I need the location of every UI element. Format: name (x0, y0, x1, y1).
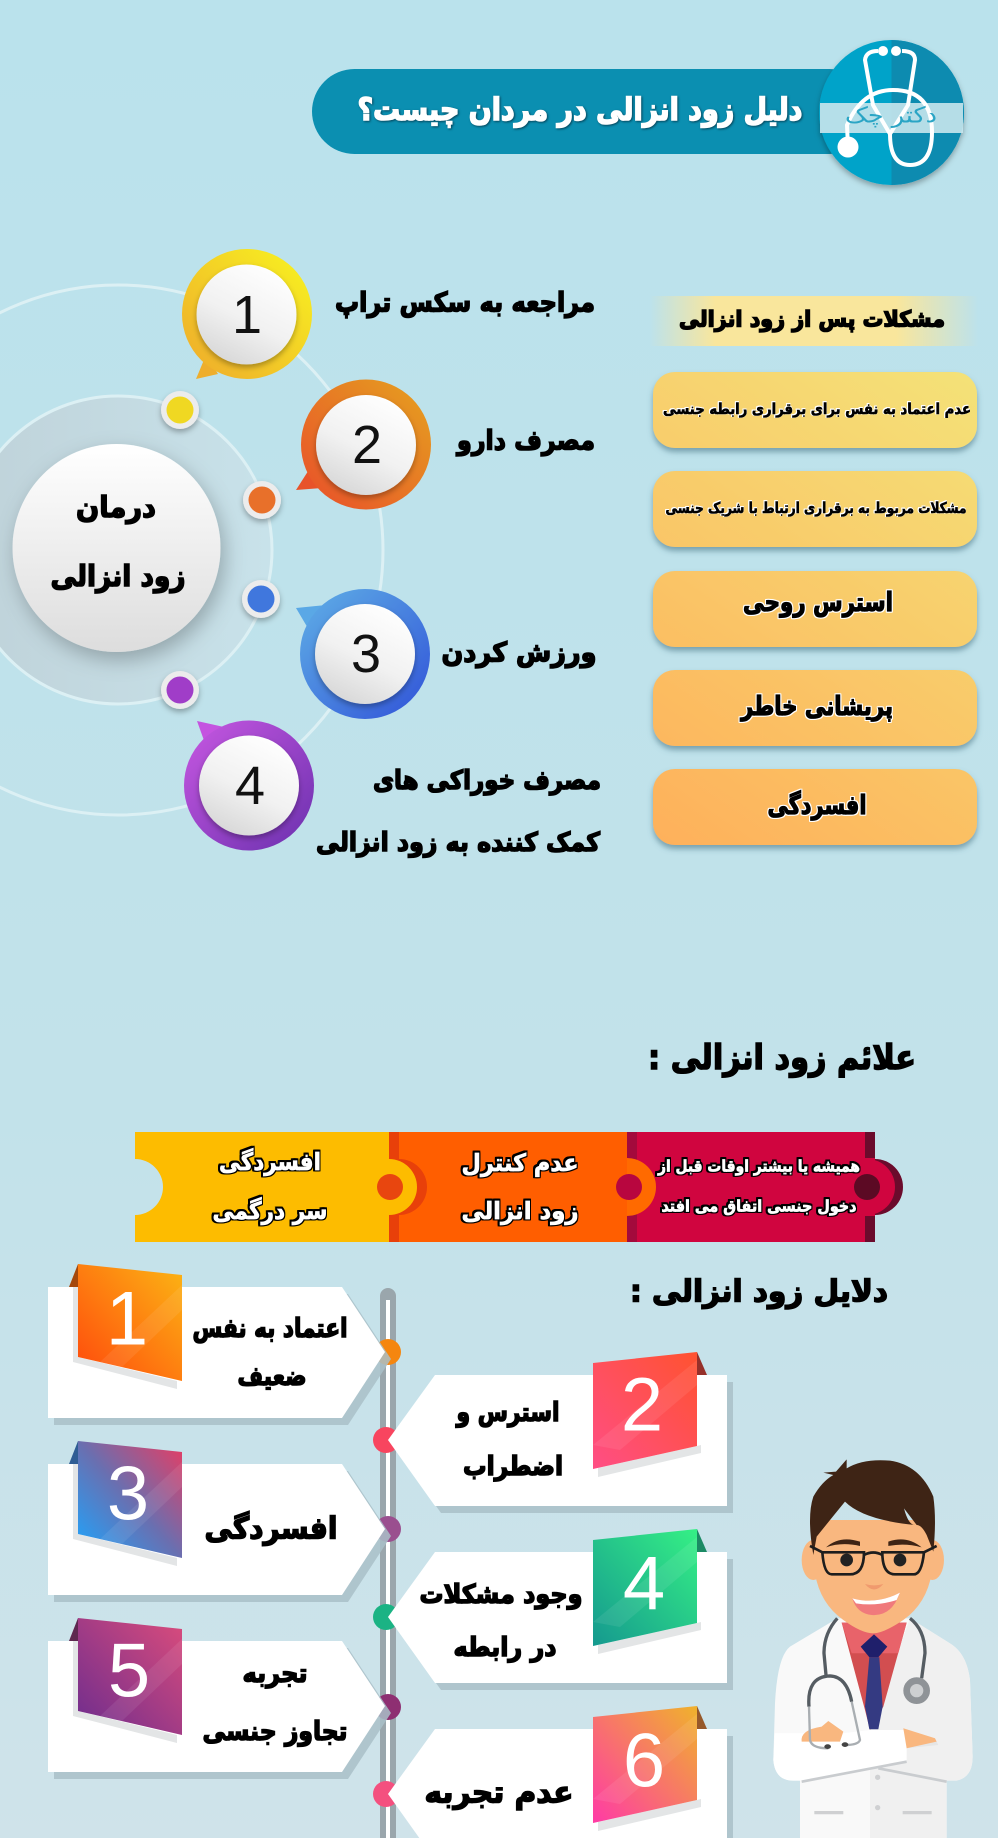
mouth (852, 1593, 900, 1615)
ears (802, 1540, 944, 1580)
bullet plum (375, 1694, 401, 1720)
item 1 bubble: 1 (232, 285, 262, 345)
problem card 3 (653, 571, 977, 647)
tie (865, 1657, 883, 1729)
problem card 4: پریشانی خاطر (739, 692, 893, 722)
cause 6 card (388, 1706, 733, 1838)
cause 4 card: وجود مشکلات (420, 1580, 582, 1610)
cause 2 card (388, 1352, 733, 1513)
glasses (810, 1546, 937, 1574)
center circle: درمان زود انزالی: زود انزالی (50, 559, 186, 593)
bullet indigo (375, 1516, 401, 1542)
orange tab (389, 1132, 656, 1242)
title pill (312, 69, 872, 154)
bullet green (373, 1604, 399, 1630)
problem card 1 (653, 372, 977, 448)
cause 3 card: 3 (107, 1452, 149, 1536)
item 4 label (316, 766, 601, 858)
outer orbit ring (0, 285, 383, 815)
cause 6 card: عدم تجربه (424, 1776, 574, 1810)
cause 1 card (48, 1264, 391, 1425)
problem card 5: افسردگی (768, 790, 866, 821)
cause 1 card: ضعیف (238, 1362, 306, 1392)
item 1 label: مراجعه به سکس تراپ (335, 288, 595, 318)
eyebrows (826, 1539, 922, 1547)
symptoms ribbon (135, 1132, 903, 1242)
orange tab: زود انزالی (462, 1197, 578, 1225)
stethoscope (809, 1618, 927, 1749)
icon: doctor character (773, 1459, 973, 1838)
problem card 2 (653, 471, 977, 547)
inner orbit disk (0, 396, 272, 704)
item 4 bubble: 4 (235, 756, 265, 816)
shirt (842, 1623, 907, 1730)
yellow tab (135, 1132, 427, 1242)
cause 1 card: 1 (106, 1276, 148, 1362)
cause 2 card: اضطراب (463, 1452, 563, 1482)
cause 2 card: استرس و (455, 1398, 560, 1428)
cause 4 card: در رابطه (454, 1633, 556, 1663)
item 4 label: کمک کننده به زود انزالی (316, 828, 601, 858)
crimson tab: همیشه یا بیشتر اوقات قبل از (657, 1156, 860, 1176)
coat buttons and pockets (814, 1775, 932, 1813)
cause 5 card: تجربه (242, 1659, 308, 1689)
cause 1 card: اعتماد به نفس (192, 1314, 348, 1344)
cause 3 card (48, 1441, 391, 1602)
problem card 3: استرس روحی (743, 588, 893, 618)
icon: stethoscope logo badge: دکتر چک (845, 104, 937, 128)
item 1 bubble (182, 249, 312, 379)
cause 5 card (48, 1618, 391, 1779)
orbit dot blue (242, 580, 280, 618)
item 3 bubble: 3 (351, 624, 381, 684)
center circle: درمان زود انزالی: درمان (76, 490, 156, 524)
orbit dot orange (243, 481, 281, 519)
panel heading band (650, 296, 978, 346)
cause 6 card: 6 (623, 1718, 665, 1804)
orange tab: عدم کنترل (462, 1149, 578, 1177)
yellow tab: سر درگمی (212, 1197, 328, 1225)
cause 4 card: 4 (623, 1542, 665, 1626)
coat (773, 1618, 973, 1838)
item 2 bubble (296, 380, 431, 510)
bullet red (373, 1427, 399, 1453)
cause 3 card: افسردگی (204, 1510, 338, 1546)
cause 4 card (388, 1529, 733, 1690)
item 2 label: مصرف دارو (455, 426, 595, 456)
item 3 label: ورزش کردن (442, 638, 596, 668)
item 2 bubble: 2 (352, 415, 382, 475)
item 4 label: مصرف خوراکی های (373, 766, 601, 796)
title text: دلیل زود انزالی در مردان چیست؟ (358, 92, 802, 128)
icon: stethoscope logo badge (819, 40, 964, 185)
yellow tab: افسردگی (219, 1148, 321, 1176)
crimson tab: دخول جنسی اتفاق می افتد (662, 1196, 856, 1216)
bullet pink (373, 1781, 399, 1807)
timeline (380, 1288, 396, 1838)
nose (865, 1584, 883, 1589)
item 4 bubble (184, 720, 314, 850)
cause 2 card: 2 (621, 1362, 663, 1448)
eyes (840, 1554, 906, 1566)
crimson tab (627, 1132, 903, 1242)
heading: causes: دلایل زود انزالی : (630, 1274, 888, 1310)
center circle: درمان زود انزالی (12, 444, 220, 652)
problem card 4 (653, 670, 977, 746)
cause 5 card: 5 (108, 1628, 150, 1714)
item 3 bubble (296, 589, 430, 719)
panel heading band: مشکلات پس از زود انزالی (679, 308, 945, 332)
problem card 5 (653, 769, 977, 845)
cause 5 card: تجاوز جنسی (202, 1717, 348, 1747)
bullet orange (375, 1339, 401, 1365)
orbit dot yellow (161, 391, 199, 429)
folded arms (773, 1730, 907, 1781)
hair (810, 1459, 935, 1555)
diagram: treatment of premature ejaculation (0, 249, 601, 858)
orbit dot purple (161, 671, 199, 709)
panel: problems after premature ejaculation (650, 296, 978, 845)
header: title banner (312, 40, 964, 185)
heading: symptoms: علائم زود انزالی : (648, 1038, 916, 1078)
face (815, 1520, 932, 1633)
